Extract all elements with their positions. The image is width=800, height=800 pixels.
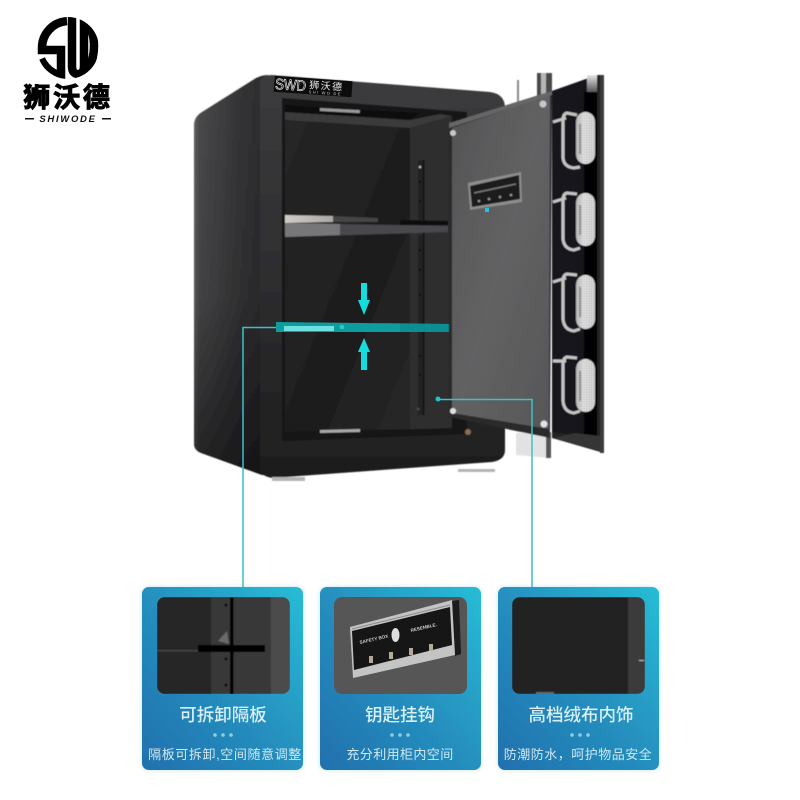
door side edge: [552, 75, 604, 453]
card heading: 钥匙挂钩: [365, 705, 435, 725]
badge name: 狮沃德: [309, 78, 344, 94]
card dots: [570, 733, 590, 737]
cabinet feet: [272, 477, 305, 481]
felt right wall: [410, 116, 452, 430]
cabinet front frame: [260, 75, 505, 478]
top rod: [517, 80, 519, 104]
card dots: [390, 733, 410, 737]
upper shelf: [285, 215, 448, 237]
door inner face: [449, 91, 552, 438]
brand badge on cabinet: [274, 76, 353, 98]
adjustable shelf rack: [416, 160, 424, 415]
door corner screws: [450, 130, 456, 136]
door lock pin: [465, 429, 471, 435]
locking bolt 1: [553, 112, 595, 168]
photo: key hook plate: RESEMBLE.: [410, 622, 437, 633]
badge letters: SWD: [275, 76, 307, 95]
arrow: up to shelf: [358, 338, 370, 370]
floor rail highlight: [320, 429, 360, 433]
locking bolt 4: [553, 357, 595, 413]
opening: [282, 98, 467, 441]
photo: shelf detail: [157, 597, 290, 694]
icon: SW monogram: [41, 17, 94, 79]
felt back wall: [285, 120, 410, 432]
door top bezel: [449, 91, 552, 128]
locking bolt 2: [553, 193, 595, 250]
card dots: [213, 733, 233, 737]
safe cabinet body: [194, 75, 505, 481]
ceiling recess: [285, 105, 420, 120]
ceiling: [285, 112, 452, 128]
card heading: 高档绒布内饰: [528, 705, 634, 725]
brand tagline: SHIWODE: [39, 114, 97, 125]
callout line: felt interior: [436, 396, 532, 588]
card description: 隔板可拆卸,空间随意调整: [148, 747, 302, 762]
floor rail: [285, 428, 465, 441]
open safe door: [449, 73, 604, 458]
bottom hinge: [516, 430, 551, 458]
arrow: down to shelf: [358, 283, 370, 315]
callout line: removable shelf: [243, 328, 276, 588]
top rail: [320, 108, 360, 113]
photo: felt lining: [512, 597, 645, 694]
callout dot: key hook: [485, 208, 489, 212]
card heading: 可拆卸隔板: [179, 705, 267, 725]
photo: key hook plate: SAFETY BOX: [359, 633, 390, 645]
card description: 充分利用柜内空间: [346, 747, 454, 762]
panel: felt interior: [498, 587, 659, 770]
locking bolt 3: [553, 274, 595, 331]
top cylinder pin: [537, 73, 552, 97]
photo: key hook plate: [334, 597, 467, 694]
panel: key hooks: [320, 587, 481, 770]
brand name: 狮沃德: [23, 83, 113, 113]
card description: 防潮防水，呵护物品安全: [504, 747, 652, 762]
badge sub name: SHI WO DE: [309, 89, 342, 97]
door key hook plate: [468, 172, 522, 210]
cabinet side panel: [194, 75, 272, 476]
logo: SHIWODE brand mark: [23, 17, 113, 125]
panel: removable shelf: [142, 587, 303, 770]
callout dot: shelf: [340, 325, 344, 329]
teal highlighted shelf: [276, 322, 454, 332]
